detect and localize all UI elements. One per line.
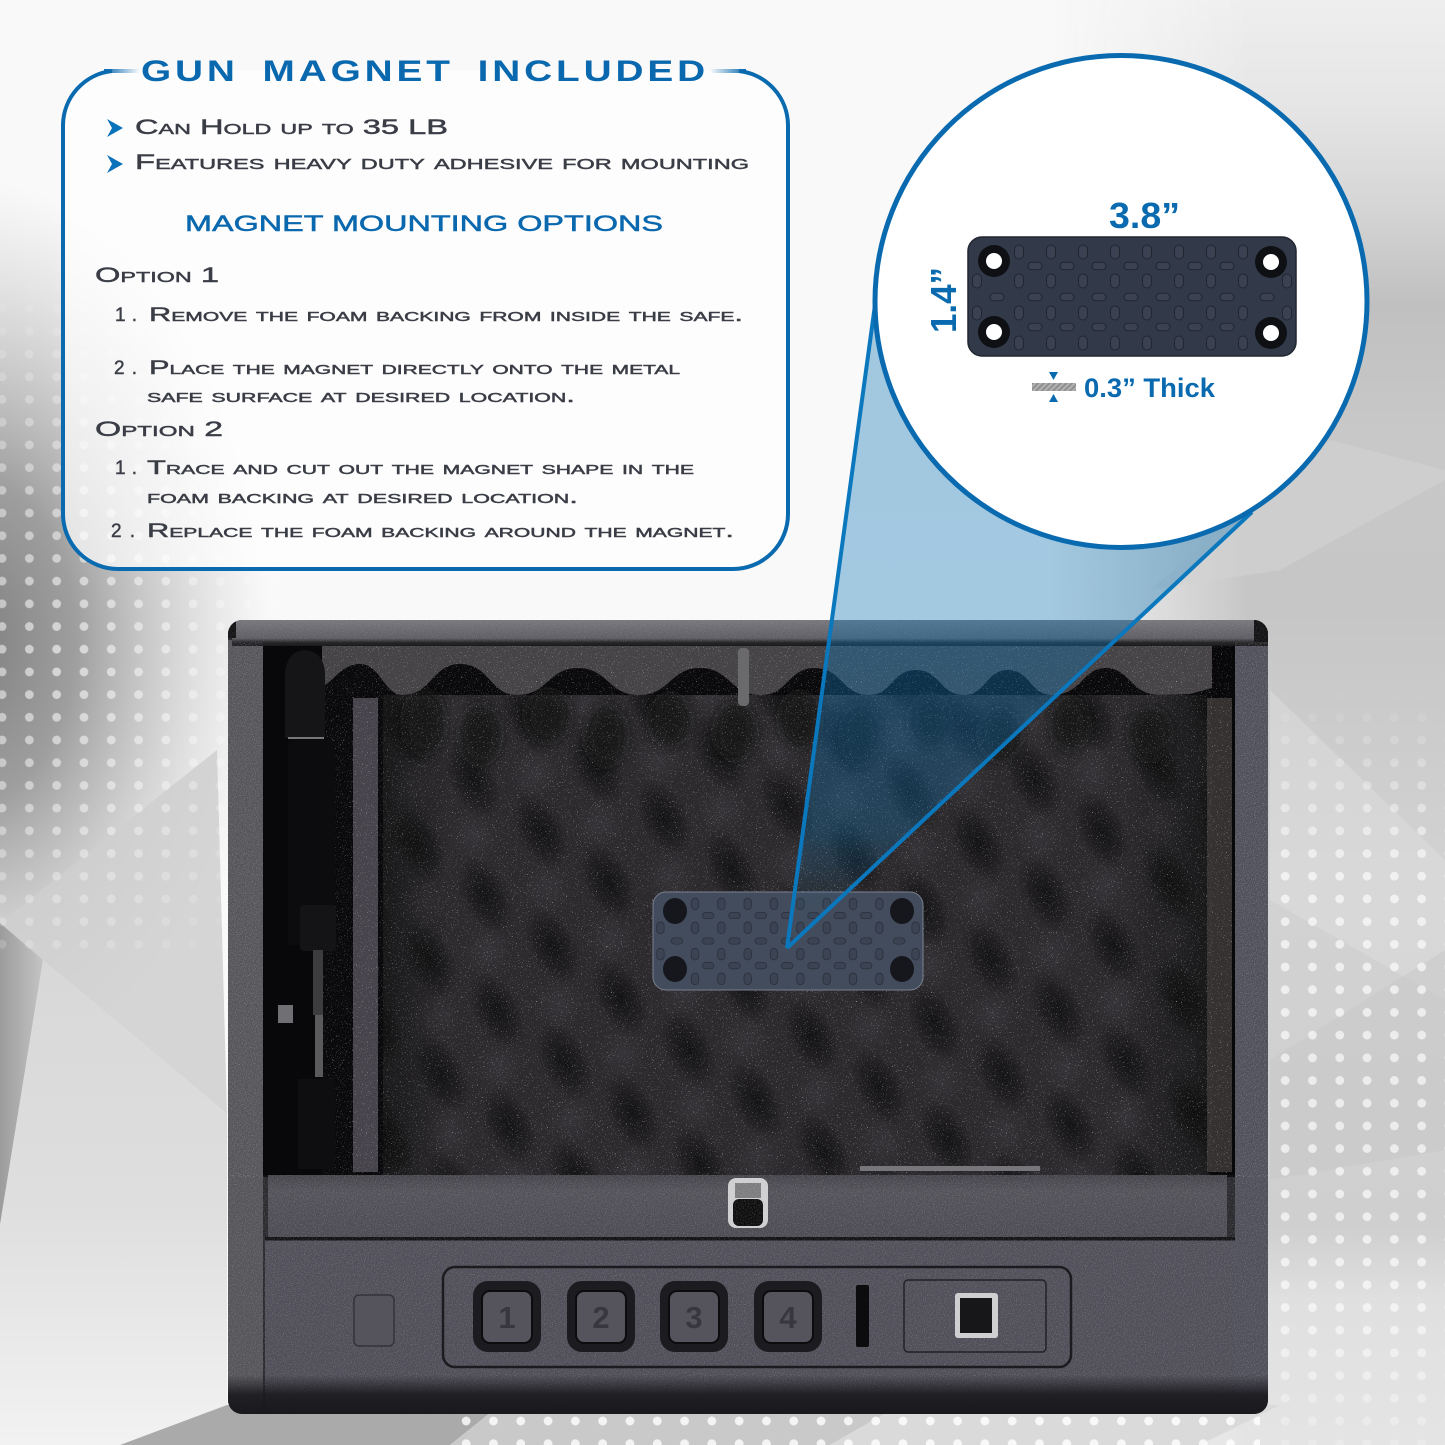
strut bolt xyxy=(278,1005,293,1023)
fingerprint panel xyxy=(904,1280,1046,1352)
front control panel xyxy=(265,1240,1235,1393)
foam flap with wavy edge xyxy=(322,645,1212,695)
latch housing xyxy=(728,1178,768,1228)
step 1 number: 1. xyxy=(115,458,137,479)
hole bottom left xyxy=(978,316,1010,348)
step 1 text: Remove the foam backing from inside the safe. xyxy=(149,305,743,326)
metal grain left wall xyxy=(228,642,263,1177)
safe: open biometric pistol safe xyxy=(228,620,1268,1415)
keypad button 3 xyxy=(660,1281,728,1352)
left foam strip xyxy=(353,698,378,1172)
panel background xyxy=(63,70,788,569)
strut body xyxy=(322,740,335,905)
icon: bullet arrow 1 xyxy=(107,119,123,137)
tray slot plate xyxy=(860,1166,1040,1171)
fingerprint sensor xyxy=(955,1293,998,1338)
magnet texture xyxy=(657,898,919,985)
strut collar xyxy=(300,905,336,951)
raised texture xyxy=(972,245,1292,350)
metal bracket xyxy=(738,648,749,706)
gas strut xyxy=(278,650,336,1169)
step 2 text line 1: Place the magnet directly onto the metal xyxy=(149,358,680,379)
plate xyxy=(968,237,1296,356)
foam shadow bumps below flap xyxy=(404,690,1170,766)
mounting hole bottom left xyxy=(663,956,687,982)
dimension: thickness: 0.3” Thick xyxy=(1084,373,1216,403)
small magnet inside safe xyxy=(653,892,923,990)
metal grain lower xyxy=(228,1175,1268,1413)
strut band xyxy=(288,737,324,739)
dimension: height: 1.4” xyxy=(923,267,964,333)
metal grain right wall xyxy=(1235,642,1268,1177)
foam back panel xyxy=(383,695,1208,1175)
keypad button 1 xyxy=(473,1281,541,1352)
cone left edge xyxy=(787,305,875,948)
lid end cap right xyxy=(1254,620,1268,642)
outline fade left xyxy=(104,69,140,73)
interior cavity xyxy=(263,642,1235,1177)
keypad button 2 xyxy=(567,1281,635,1352)
panel: gun magnet included xyxy=(63,55,788,569)
keypad button 4 xyxy=(754,1281,822,1352)
bullet text: hold capacity: Can Hold up to 35 LB xyxy=(135,116,448,139)
strut spring xyxy=(315,1015,323,1077)
strut top xyxy=(285,650,325,738)
safe body shell xyxy=(228,620,1268,1414)
bullet text: adhesive: Features heavy duty adhesive for mounting xyxy=(135,151,749,174)
lid end cap left xyxy=(228,620,236,638)
enlarged magnet xyxy=(968,237,1296,356)
keypad plate xyxy=(443,1267,1071,1367)
latch xyxy=(728,1178,768,1228)
hole top left xyxy=(978,245,1010,277)
circle disc xyxy=(875,56,1367,548)
metal grain lid xyxy=(228,620,1268,642)
option 1 heading: Option 1 xyxy=(95,264,219,287)
mounting hole bottom right xyxy=(890,956,914,982)
magnet plate xyxy=(653,892,923,990)
keypad button 2: 2 xyxy=(592,1300,610,1335)
bullet list xyxy=(107,116,749,174)
dimension: width: 3.8” xyxy=(1109,195,1180,236)
icon: bullet arrow 2 xyxy=(107,155,123,173)
LED strip xyxy=(856,1285,869,1347)
panel outline xyxy=(63,71,788,569)
callout cone xyxy=(787,300,1252,948)
option 1 steps xyxy=(95,264,743,407)
latch hook xyxy=(735,1183,761,1198)
subheading: magnet mounting options: MAGNET MOUNTING OPTIONS xyxy=(185,211,663,236)
step 2 number: 2. xyxy=(114,358,137,379)
panel seam xyxy=(265,1237,1235,1240)
lower tray xyxy=(268,1175,1227,1239)
icon: thickness xyxy=(1032,372,1076,402)
strut rod xyxy=(313,950,323,1015)
keypad button 1: 1 xyxy=(498,1300,516,1335)
foam edge shading xyxy=(383,695,1208,1175)
magnification circle xyxy=(875,56,1367,548)
step 2 number: 2. xyxy=(111,521,135,542)
outline fade right xyxy=(710,69,746,73)
right wall xyxy=(1235,640,1268,1415)
foam grain xyxy=(322,645,1212,1175)
foam speckle xyxy=(322,645,1232,1175)
lid bar xyxy=(232,620,1268,646)
cone right edge xyxy=(787,512,1252,948)
bottom shadow xyxy=(228,1375,1268,1414)
key port cover xyxy=(354,1295,394,1346)
mounting hole top left xyxy=(663,898,687,924)
step 1 number: 1. xyxy=(115,305,137,326)
latch opening xyxy=(733,1199,763,1226)
keypad button 3: 3 xyxy=(685,1300,703,1335)
right foam strip xyxy=(1207,698,1232,1172)
step 1 text line 2: foam backing at desired location. xyxy=(147,487,578,508)
step 2 text: Replace the foam backing around the magnet. xyxy=(147,521,734,542)
hole bottom right xyxy=(1255,317,1287,349)
strut base xyxy=(322,1079,335,1169)
mounting hole top right xyxy=(890,898,914,924)
title: GUN MAGNET INCLUDED xyxy=(141,55,709,88)
hole top right xyxy=(1255,246,1287,278)
option 2 steps xyxy=(95,418,734,542)
cone fill xyxy=(787,300,1252,948)
keypad button 4: 4 xyxy=(779,1300,797,1335)
left wall xyxy=(228,640,263,1415)
step 1 text line 1: Trace and cut out the magnet shape in the xyxy=(147,458,695,479)
step 2 text line 2: safe surface at desired location. xyxy=(147,386,575,407)
option 2 heading: Option 2 xyxy=(95,418,223,441)
